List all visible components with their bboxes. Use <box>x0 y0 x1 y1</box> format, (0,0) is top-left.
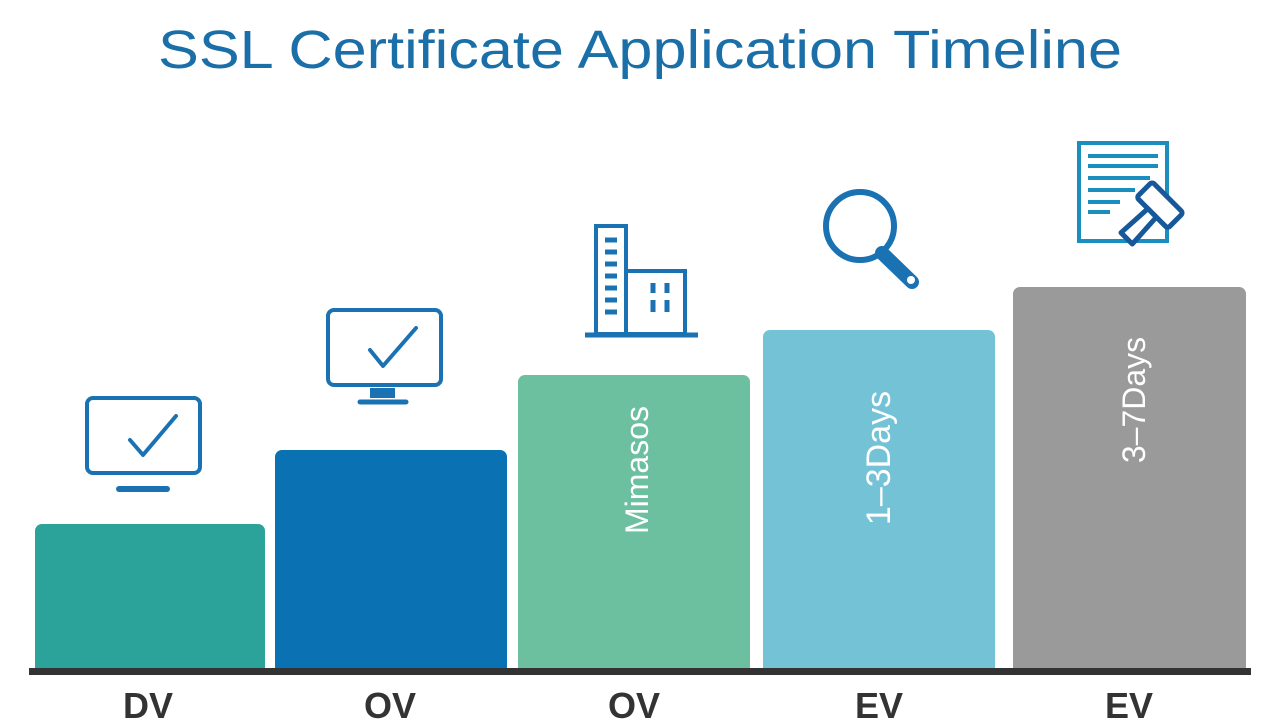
bar: EV 3-7 days <box>1013 287 1246 674</box>
bar: OV minutes <box>518 375 750 674</box>
icon: monitor check OV <box>328 310 441 402</box>
axis line <box>29 668 1251 675</box>
icon: monitor check DV <box>87 398 200 489</box>
icon: document with gavel <box>1079 143 1183 254</box>
title: SSL Certificate Application Timeline <box>158 20 1122 80</box>
icon: magnifier <box>826 192 915 284</box>
bar chart <box>29 287 1251 675</box>
bar: OV <box>275 450 507 674</box>
bar: EV 1-3 days <box>763 330 995 674</box>
bar: OV minutes: Mimasos <box>619 406 655 534</box>
bar: EV 3-7 days: 3–7Days <box>1116 337 1152 463</box>
icon: building <box>585 226 698 335</box>
bar: EV 1-3 days: 1–3Days <box>860 391 898 525</box>
axis labels <box>123 685 1153 720</box>
bar: DV <box>35 524 265 674</box>
